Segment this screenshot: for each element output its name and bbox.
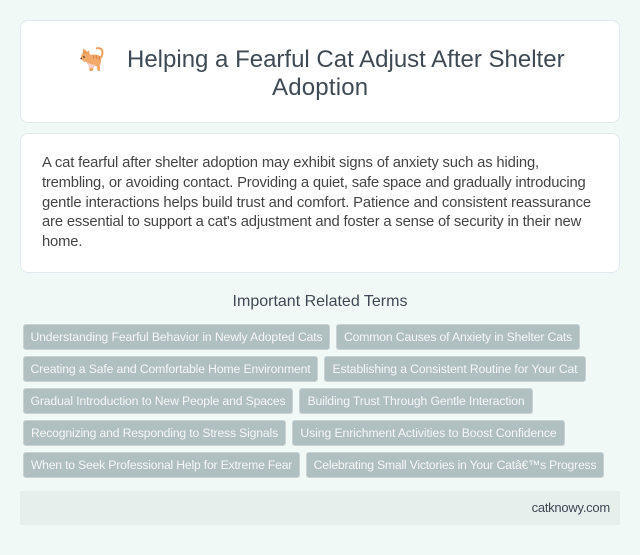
chip [23, 452, 300, 478]
chip: Understanding Fearful Behavior in Newly Adopted Cats [30, 330, 323, 344]
description text: home. [42, 234, 82, 250]
description text: A cat fearful after shelter adoption may exhibit signs of anxiety such as hiding, [42, 155, 539, 171]
chip [336, 324, 580, 350]
chip: Common Causes of Anxiety in Shelter Cats [344, 330, 572, 344]
chip: Using Enrichment Activities to Boost Confidence [300, 426, 557, 440]
chip [324, 356, 586, 382]
title: Adoption [272, 74, 368, 101]
chip list [23, 324, 604, 478]
chip: Recognizing and Responding to Stress Signals [31, 426, 278, 440]
icon: cat [80, 47, 104, 71]
title [127, 46, 565, 101]
title: Helping a Fearful Cat Adjust After Shelter [127, 46, 565, 73]
heading: important related terms: Important Related Terms [233, 293, 407, 310]
footer text: catknowy.com [532, 500, 610, 515]
chip [23, 356, 318, 382]
description text [42, 155, 591, 250]
chip: Establishing a Consistent Routine for Your Cat [333, 362, 577, 376]
panel: description card [20, 133, 620, 273]
chip [299, 388, 533, 414]
panel: title card [20, 20, 620, 123]
description text: gentle interactions helps build trust and comfort. Patience and consistent reassurance [42, 195, 591, 211]
description text: are essential to support a cat's adjustment and foster a sense of security in their new [42, 214, 581, 230]
chip: When to Seek Professional Help for Extreme Fear [31, 458, 292, 472]
chip: Creating a Safe and Comfortable Home Environment [30, 362, 311, 376]
chip [23, 324, 330, 350]
chip: Celebrating Small Victories in Your Catâ€™s Progress [314, 458, 596, 472]
chip: Gradual Introduction to New People and Spaces [30, 394, 286, 408]
chip [23, 388, 293, 414]
chip [23, 420, 286, 446]
chip [306, 452, 604, 478]
chip: Building Trust Through Gentle Interaction [307, 394, 525, 408]
footer bar [20, 491, 620, 525]
description text: trembling, or avoiding contact. Providing a quiet, safe space and gradually introducing [42, 175, 586, 191]
chip [292, 420, 565, 446]
